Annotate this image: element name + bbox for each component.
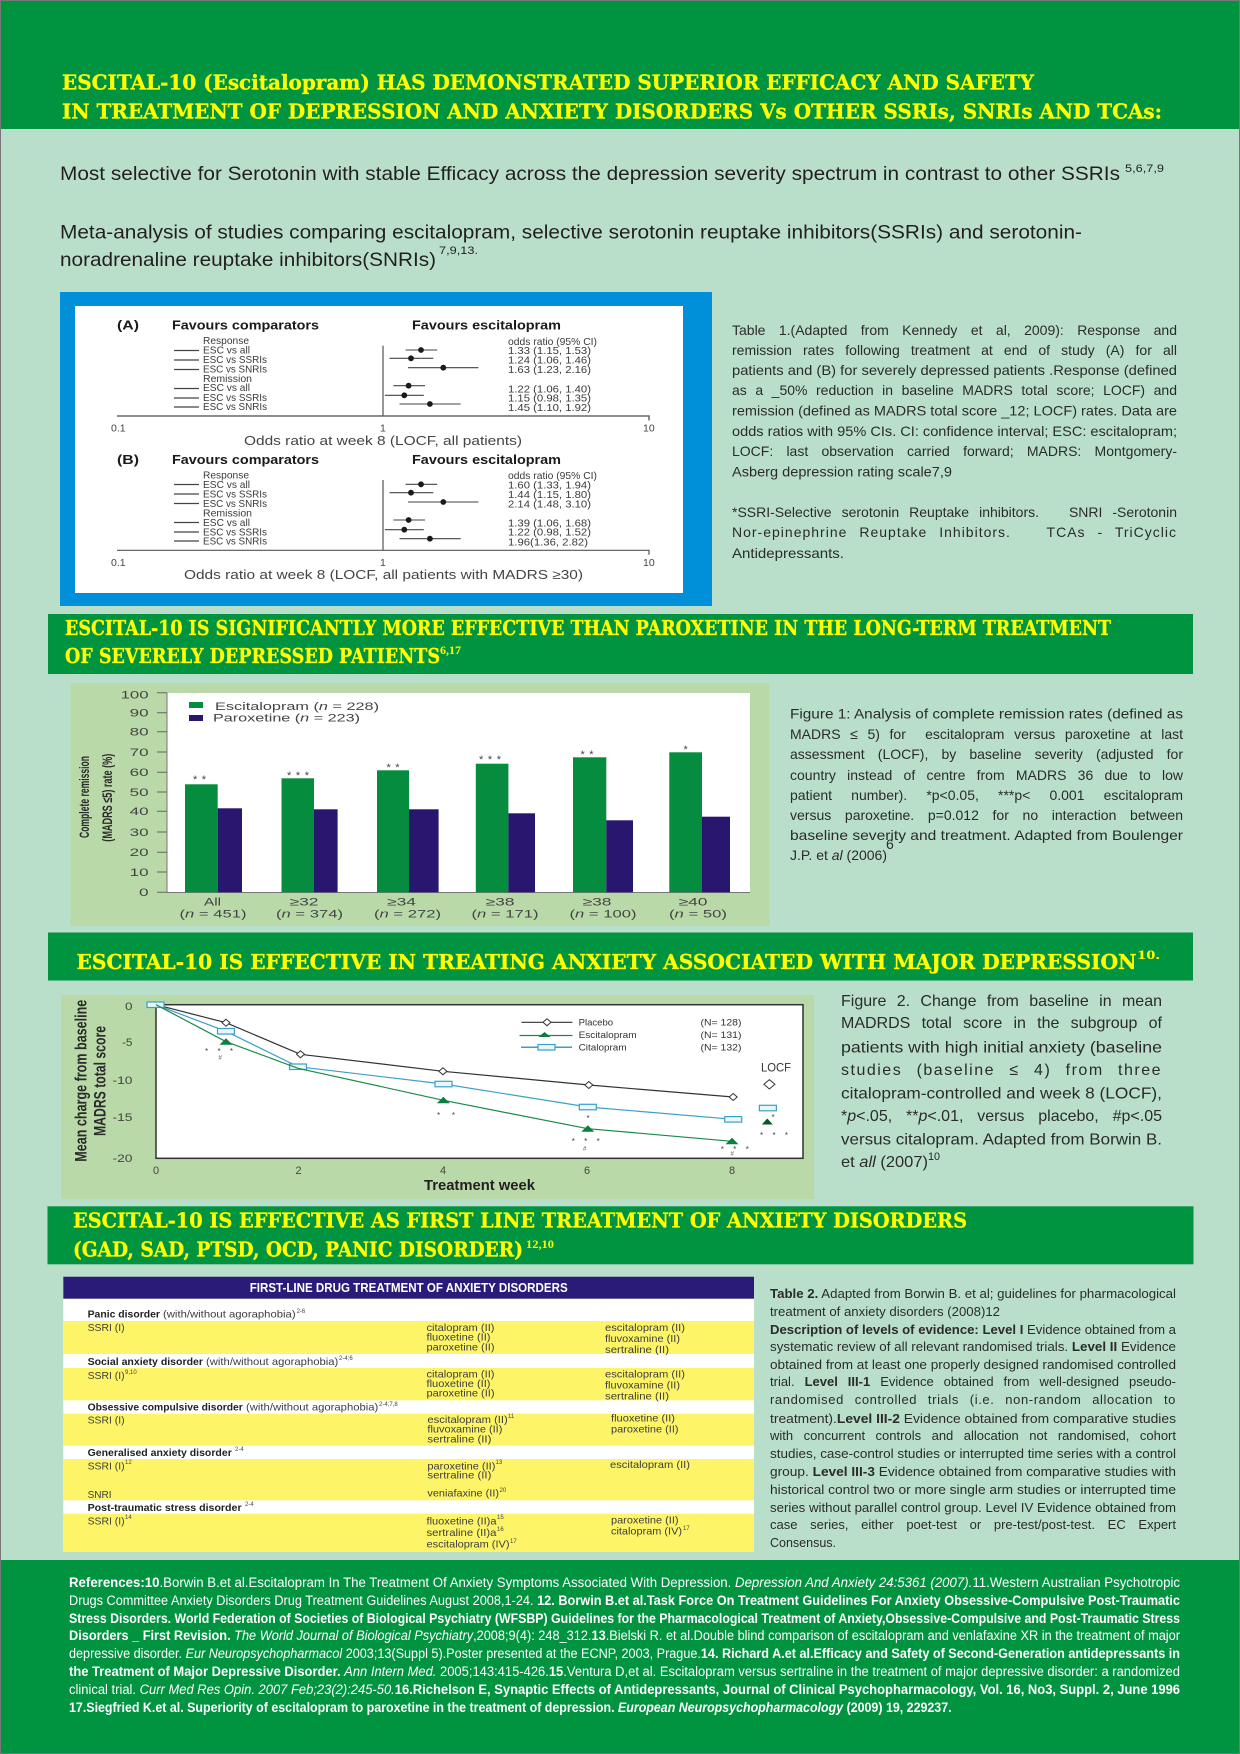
forest plot A: odds ratio (95% CI) <box>508 336 597 348</box>
y axis numbers: 70 <box>130 747 149 759</box>
y axis numbers: 90 <box>130 708 149 720</box>
row: generalised anxiety disorder: 12 <box>125 1460 132 1466</box>
x axis labels: (n = 50) <box>669 908 727 920</box>
forest plot B: 1.22 (0.98, 1.52) <box>508 527 591 539</box>
significance marks: *** <box>572 1137 600 1146</box>
row: social anxiety disorder: escitalopram (II) <box>605 1368 685 1380</box>
purple bars <box>218 808 730 892</box>
row: social anxiety disorder <box>88 1356 685 1402</box>
Table 1 caption: Asberg depression rating scale7,9 <box>732 464 952 480</box>
forest plot A: 1.63 (1.23, 2.16) <box>508 364 591 376</box>
row: social anxiety disorder: (with/without agoraphobia) <box>206 1356 338 1368</box>
row: social anxiety disorder: fluoxetine (II) <box>426 1378 490 1390</box>
Figure 1 caption: J.P. et al (2006) <box>790 847 887 863</box>
row: generalised anxiety disorder: Generalised anxiety disorder <box>88 1447 232 1459</box>
Figure 1 caption: Figure 1: Analysis of complete remission rates (defined as <box>790 705 1183 721</box>
band: first line treatment heading: (GAD, SAD, PTSD, OCD, PANIC DISORDER) <box>73 1238 523 1262</box>
x axis labels: ≥38 <box>582 897 612 909</box>
forest plot A: ESC vs all <box>203 382 250 394</box>
panel: MADRS line chart <box>61 995 814 1199</box>
Figure 1 caption: patient number). *p<0.05, ***p< 0.001 escitalopram <box>790 786 1183 802</box>
y axis title <box>72 1000 110 1162</box>
row: social anxiety disorder: fluvoxamine (II) <box>605 1379 680 1391</box>
legend <box>189 701 379 725</box>
forest plot A: ESC vs SSRIs <box>203 354 267 366</box>
row: panic disorder: fluvoxamine (II) <box>605 1333 680 1345</box>
footer: references: depressive disorder. Eur Neuropsychopharmacol 2003;13(Suppl 5).Poster presented at the ECNP, 2003, Prague.14. Richard A.et al.Efficacy and Safety of Second-Generation antidepressants in <box>69 1646 1180 1661</box>
significance marks <box>205 1047 788 1158</box>
y axis title: (MADRS ≤5) rate (%) <box>99 754 115 842</box>
forest plot B: ESC vs SSRIs <box>203 526 267 538</box>
Table 2 caption: treatment). Level III-2 Evidence obtained from comparative studies <box>770 1411 1177 1426</box>
x axis numbers <box>153 1165 735 1177</box>
series: escitalopram <box>156 1005 773 1144</box>
forest plot A: ESC vs SSRIs <box>203 392 267 404</box>
forest plot B: Response <box>203 470 249 482</box>
x axis labels: ≥40 <box>678 897 708 909</box>
Table 2 caption: randomised controlled trials (i.e. non-random allocation to <box>770 1392 1176 1407</box>
significance marks: # <box>218 1056 222 1062</box>
y axis title <box>76 754 115 842</box>
y axis numbers: 100 <box>121 690 149 702</box>
y axis numbers <box>112 1001 132 1165</box>
Figure 1 caption: assessment (LOCF), by baseline severity (adjusted for <box>790 746 1183 762</box>
row: panic disorder <box>88 1308 685 1356</box>
legend: (N= 131) <box>700 1030 742 1040</box>
Figure 2 caption: patients with high initial anxiety (baseline <box>841 1040 1162 1057</box>
row: post-traumatic stress disorder: citalopram (IV) <box>611 1526 682 1538</box>
Figure 2 caption: *p<.05, **p<.01, versus placebo, #p<.05 <box>841 1108 1162 1124</box>
Table 1 caption: Antidepressants. <box>732 545 844 561</box>
band: first line treatment heading: 12,10 <box>526 1237 554 1251</box>
Table 2 caption: studies, case-control studies or interrupted time series with a control <box>770 1446 1176 1461</box>
y axis numbers: 50 <box>130 787 149 799</box>
row: panic disorder: SSRI (I) <box>88 1322 125 1334</box>
Figure 1 caption <box>790 705 1183 863</box>
row: obsessive compulsive disorder: escitalopram (II) <box>427 1414 508 1426</box>
significance marks: * <box>586 1114 590 1123</box>
forest plot B: 1.39 (1.06, 1.68) <box>508 517 591 529</box>
row: generalised anxiety disorder: veniafaxine (II) <box>427 1488 499 1500</box>
forest plot A: 1.45 (1.10, 1.92) <box>508 402 591 414</box>
row: obsessive compulsive disorder: Obsessive compulsive disorder <box>88 1401 243 1413</box>
row: post-traumatic stress disorder: Post-traumatic stress disorder <box>88 1502 242 1514</box>
Table 2 caption: treatment of anxiety disorders (2008)12 <box>770 1304 1000 1319</box>
significance marks: *** <box>721 1145 749 1154</box>
row: generalised anxiety disorder: 13 <box>496 1460 503 1466</box>
y axis numbers: -20 <box>112 1153 132 1165</box>
forest plot A: (A) <box>117 318 139 333</box>
row: generalised anxiety disorder: sertraline (II) <box>427 1470 491 1482</box>
x axis labels <box>180 897 727 920</box>
footer: references: the Treatment of Major Depressive Disorder. Ann Intern Med. 2005;143:415-426.15.Ventura D,et al. Escitalopram versus sertraline in the treatment of major depressive disorder: a randomized <box>69 1664 1180 1679</box>
legend: Escitalopram ( n = 228) <box>215 701 379 713</box>
row: post-traumatic stress disorder: escitalopram (IV) <box>426 1539 510 1551</box>
Figure 2 caption <box>841 992 1162 1171</box>
x axis labels: (n = 171) <box>472 908 538 920</box>
Table 2 caption: series without parallel control group. Level IV Evidence obtained from <box>770 1500 1176 1515</box>
footer: references: Drugs Committee Anxiety Disorders Drug Treatment Guidelines August 2008,1-24. 12. Borwin B.et al.Task Force On Treatment Guidelines For Anxiety Obsessive-Compulsive Post-Traumatic <box>69 1593 1180 1608</box>
forest plot B: 1.96(1.36, 2.82) <box>508 537 588 549</box>
row: obsessive compulsive disorder: fluvoxamine (II) <box>427 1424 502 1436</box>
Table 2 caption: Table 2. Adapted from Borwin B. et al; guidelines for pharmacological <box>770 1286 1176 1301</box>
row: post-traumatic stress disorder: 17 <box>510 1539 517 1545</box>
LOCF label: LOCF <box>761 1062 791 1074</box>
forest plot A: 1.24 (1.06, 1.46) <box>508 354 591 366</box>
forest plot B: 0.1 <box>111 557 126 569</box>
forest plot B <box>111 452 655 582</box>
y axis numbers: -5 <box>122 1037 132 1049</box>
Figure 2 caption: MADRDS total score in the subgroup of <box>841 1015 1162 1032</box>
x axis labels: ≥38 <box>486 897 514 909</box>
row: social anxiety disorder: Social anxiety disorder <box>88 1356 203 1368</box>
forest plot B: Remission <box>203 507 252 519</box>
forest plot B: 1.60 (1.33, 1.94) <box>508 480 591 492</box>
x axis labels: (n = 374) <box>276 908 343 920</box>
x axis numbers: 0 <box>153 1165 159 1177</box>
Table 1 caption: patients and (B) for severely depressed patients .Response (defined <box>732 362 1177 378</box>
band: anxiety heading <box>48 932 1193 980</box>
row: generalised anxiety disorder: SNRI <box>88 1489 112 1501</box>
forest plot A: 1.15 (0.98, 1.35) <box>508 393 591 405</box>
Figure 1 caption: country instead of centre from MADRS 36 due to low <box>790 766 1183 782</box>
row: obsessive compulsive disorder: SSRI (I) <box>88 1415 125 1427</box>
forest plot B: 1.44 (1.15, 1.80) <box>508 489 591 501</box>
footer: references: Disorders _ First Revision. The World Journal of Biological Psychiatry,2008;9(4): 248_312.13.Bielski R. et al.Double blind comparison of escitalopram and venlafaxine XR in the treatment of major <box>69 1628 1180 1643</box>
Figure 1 caption: MADRS ≤ 5) for escitalopram versus paroxetine at last <box>790 726 1183 742</box>
row: panic disorder: sertraline (II) <box>605 1344 669 1356</box>
header band <box>0 0 1240 129</box>
row: generalised anxiety disorder: SSRI (I) <box>88 1460 125 1472</box>
forest plot B: Favours comparators <box>172 452 319 467</box>
Figure 1 caption: baseline severity and treatment. Adapted from Boulenger <box>790 827 1183 843</box>
Table 1 caption: odds ratios with 95% CIs. CI: confidence interval; ESC: escitalopram; <box>732 423 1177 439</box>
main title: IN TREATMENT OF DEPRESSION AND ANXIETY DISORDERS Vs OTHER SSRIs, SNRIs AND TCAs: <box>62 100 1162 124</box>
row: generalised anxiety disorder: paroxetine (II) <box>427 1460 495 1472</box>
row: generalised anxiety disorder <box>88 1447 690 1501</box>
row: panic disorder: fluoxetine (II) <box>426 1332 490 1344</box>
panel: remission bar chart <box>70 683 770 926</box>
forest plot A: Response <box>203 335 249 347</box>
band: paroxetine heading: 6,17 <box>440 643 461 657</box>
row: post-traumatic stress disorder: 16 <box>497 1527 504 1533</box>
y axis numbers <box>121 690 149 899</box>
forest plot B: ESC vs all <box>203 517 250 529</box>
x axis labels: (n = 451) <box>180 908 246 920</box>
y axis numbers: 30 <box>130 827 149 839</box>
footer: references: References:10.Borwin B.et al.Escitalopram In The Treatment Of Anxiety Symptoms Associated With Depression. Depression And Anxiety 24:5361 (2007).11.Western Australian Psychotropic <box>69 1575 1180 1590</box>
forest plot B: (B) <box>117 452 139 467</box>
significance stars: * <box>684 744 688 756</box>
Figure 1 caption: 6 <box>886 836 894 852</box>
Figure 2 caption: Figure 2. Change from baseline in mean <box>841 992 1162 1010</box>
Table 2 caption <box>770 1286 1177 1550</box>
significance marks: # <box>730 1152 734 1158</box>
Figure 2 caption: studies (baseline ≤ 4) from three <box>841 1062 1162 1078</box>
band: first line treatment heading <box>48 1206 1194 1264</box>
Table 1 caption <box>732 321 1177 561</box>
row: obsessive compulsive disorder: 2-4;7,8 <box>379 1402 398 1408</box>
x axis title: Treatment week <box>424 1177 536 1194</box>
significance stars <box>193 744 688 786</box>
forest plot B: ESC vs SNRIs <box>203 498 267 510</box>
Table 2 caption: trial. Level III-1 Evidence obtained from well-designed pseudo- <box>770 1374 1176 1389</box>
row: obsessive compulsive disorder: paroxetine (II) <box>611 1424 678 1436</box>
forest plot A: Remission <box>203 373 252 385</box>
row: obsessive compulsive disorder: (with/without agoraphobia) <box>246 1401 378 1413</box>
Table 1 caption: as a _50% reduction in baseline MADRS total score; LOCF) and <box>732 382 1177 398</box>
y axis numbers: 10 <box>130 867 149 879</box>
Figure 1 caption: versus paroxetine. p=0.012 for no interaction between <box>790 807 1183 823</box>
significance marks: * <box>772 1113 775 1122</box>
row: post-traumatic stress disorder: SSRI (I) <box>88 1515 125 1527</box>
row: obsessive compulsive disorder: sertraline (II) <box>427 1433 491 1445</box>
significance marks: ** <box>437 1111 455 1120</box>
forest plot A: 1.22 (1.06, 1.40) <box>508 383 591 395</box>
forest plot A: Favours comparators <box>172 318 319 333</box>
panel: anxiety drug table <box>63 1277 754 1552</box>
band: paroxetine heading <box>48 614 1193 674</box>
forest plot B: ESC vs SSRIs <box>203 488 267 500</box>
forest plot B: ESC vs all <box>203 479 250 491</box>
x axis labels: All <box>204 897 221 909</box>
band: first line treatment heading: ESCITAL-10 IS EFFECTIVE AS FIRST LINE TREATMENT OF ANXIETY DISORDERS <box>73 1209 967 1233</box>
forest plot B: 2.14 (1.48, 3.10) <box>508 498 591 510</box>
row: panic disorder: citalopram (II) <box>426 1322 494 1334</box>
series: citalopram <box>147 1002 776 1122</box>
x axis labels: (n = 272) <box>374 908 441 920</box>
forest plot A: 0.1 <box>111 422 126 434</box>
row: generalised anxiety disorder: escitalopram (II) <box>610 1459 690 1471</box>
Table 1 caption: Table 1.(Adapted from Kennedy et al, 2009): Response and <box>732 322 1177 338</box>
series: placebo <box>156 1005 775 1100</box>
y axis numbers: 60 <box>130 767 149 779</box>
row: panic disorder: Panic disorder <box>88 1308 160 1320</box>
intro text: meta-analysis: Meta-analysis of studies comparing escitalopram, selective serotonin reuptake inhibitors(SSRIs) and serotonin- <box>60 221 1082 243</box>
Figure 2 caption: versus citalopram. Adapted from Borwin B. <box>841 1132 1162 1149</box>
row: post-traumatic stress disorder: 17 <box>683 1526 690 1532</box>
forest plot B: Odds ratio at week 8 (LOCF, all patients with MADRS ≥30) <box>184 567 583 582</box>
Table 2 caption: Consensus. <box>770 1535 836 1550</box>
forest plot A: Favours escitalopram <box>412 318 561 333</box>
legend: (N= 128) <box>700 1018 742 1028</box>
row: obsessive compulsive disorder <box>88 1401 679 1445</box>
x axis numbers: 2 <box>295 1165 302 1177</box>
main title <box>62 70 1162 124</box>
y axis numbers: 40 <box>130 806 149 818</box>
x axis numbers: 6 <box>584 1165 590 1177</box>
x axis numbers: 8 <box>729 1165 735 1177</box>
row: post-traumatic stress disorder: 2-4 <box>245 1502 254 1508</box>
significance marks: # <box>583 1146 587 1152</box>
row: social anxiety disorder: citalopram (II) <box>426 1368 494 1380</box>
row: social anxiety disorder: sertraline (II) <box>605 1390 669 1402</box>
Table 1 caption: remission rates following treatment at end of study (A) for all <box>732 342 1177 358</box>
Table 2 caption: with concurrent controls and allocation not randomised, cohort <box>770 1428 1176 1443</box>
y axis numbers: 80 <box>130 726 149 738</box>
green bars <box>185 752 702 892</box>
x axis labels: ≥34 <box>387 897 416 909</box>
Table 2 caption: historical control two or more single arm studies or interrupted time <box>770 1482 1176 1497</box>
y axis numbers: -10 <box>112 1075 132 1087</box>
y axis numbers: 0 <box>139 887 149 899</box>
forest plot B: 10 <box>643 557 655 569</box>
significance marks: *** <box>205 1047 233 1056</box>
row: social anxiety disorder: 2-4;6 <box>339 1356 353 1362</box>
row: generalised anxiety disorder: 2-4 <box>235 1447 244 1453</box>
intro text: selectivity: 5,6,7,9 <box>1125 163 1164 175</box>
intro text: meta-analysis: 7,9,13. <box>439 245 478 257</box>
x axis numbers: 4 <box>440 1165 446 1177</box>
Figure 2 caption: citalopram-controlled and week 8 (LOCF), <box>841 1086 1162 1103</box>
Figure 2 caption: 10 <box>928 1151 940 1163</box>
intro text: selectivity: Most selective for Serotonin with stable Efficacy across the depression severity spectrum in contrast to other SSRIs <box>60 163 1120 185</box>
legend: Placebo <box>579 1018 613 1028</box>
row: social anxiety disorder: paroxetine (II) <box>426 1388 494 1400</box>
forest plot A: Odds ratio at week 8 (LOCF, all patients) <box>244 433 522 448</box>
Table 2 caption: group. Level III-3 Evidence obtained from comparative studies with <box>770 1464 1176 1479</box>
legend: Paroxetine ( n = 223) <box>213 713 360 725</box>
y axis numbers: 0 <box>125 1001 132 1013</box>
forest plot A: ESC vs all <box>203 344 250 356</box>
row: obsessive compulsive disorder: fluoxetine (II) <box>611 1413 675 1425</box>
row: post-traumatic stress disorder: sertraline (II)a <box>426 1527 497 1539</box>
footer: references <box>0 1560 1240 1754</box>
significance stars: ** <box>580 749 594 761</box>
row: panic disorder: 2-6 <box>297 1309 306 1315</box>
forest plot B: odds ratio (95% CI) <box>508 470 597 482</box>
x axis labels: (n = 100) <box>570 908 636 920</box>
row: post-traumatic stress disorder: 14 <box>125 1515 132 1521</box>
forest plot A: ESC vs SNRIs <box>203 364 267 376</box>
Table 2 caption: case series, either poet-test or pre-test/post-test. EC Expert <box>770 1517 1176 1532</box>
Table 1 caption: *SSRI-Selective serotonin Reuptake inhibitors. SNRI -Serotonin <box>732 504 1177 520</box>
y axis title: MADRS total score <box>90 1026 110 1136</box>
row: social anxiety disorder: 9,10 <box>125 1370 137 1376</box>
footer: references: clinical trial. Curr Med Res Opin. 2007 Feb;23(2):245-50.16.Richelson E, Synaptic Effects of Antidepressants, Journal of Clinical Psychopharmacology, Vol. 16, No3, Suppl. 2, June 1996 <box>69 1682 1180 1697</box>
row: post-traumatic stress disorder: fluoxetine (II)a <box>426 1515 497 1527</box>
significance stars: *** <box>287 770 310 782</box>
Table 1 caption: remission (defined as MADRS total score _12; LOCF) rates. Data are <box>732 402 1177 418</box>
forest plot B: 1 <box>380 557 386 569</box>
significance stars: *** <box>479 754 502 766</box>
significance marks: *** <box>760 1131 788 1140</box>
row: obsessive compulsive disorder: 11 <box>508 1414 515 1420</box>
row: post-traumatic stress disorder <box>88 1502 690 1551</box>
legend: Citalopram <box>579 1042 627 1052</box>
table header: FIRST-LINE DRUG TREATMENT OF ANXIETY DISORDERS <box>250 1281 568 1295</box>
legend <box>520 1018 742 1052</box>
significance stars: ** <box>386 762 400 774</box>
row: post-traumatic stress disorder: paroxetine (II) <box>611 1514 678 1526</box>
Figure 2 caption: et all (2007) <box>841 1154 928 1171</box>
row: panic disorder: escitalopram (II) <box>605 1322 685 1334</box>
intro text: meta-analysis: noradrenaline reuptake inhibitors(SNRIs) <box>60 249 436 271</box>
row: generalised anxiety disorder: 20 <box>500 1488 507 1494</box>
forest plot A: 1 <box>380 422 386 434</box>
y axis title: Mean charge from baseline <box>72 1000 90 1162</box>
y axis title: Complete remission <box>76 756 92 838</box>
panel: forest plot <box>60 292 712 606</box>
forest plot A <box>111 318 655 448</box>
forest plot B: ESC vs SNRIs <box>203 536 267 548</box>
legend: Escitalopram <box>579 1030 637 1040</box>
footer: references: 17.Siegfried K.et al. Superiority of escitalopram to paroxetine in the treatment of depression. European Neuropsychopharmacology (2009) 19, 229237. <box>69 1700 952 1715</box>
Table 2 caption: obtained from at least one properly designed randomised controlled <box>770 1357 1176 1372</box>
row: social anxiety disorder: SSRI (I) <box>88 1370 125 1382</box>
significance stars: ** <box>193 774 207 786</box>
row: post-traumatic stress disorder: 15 <box>497 1515 504 1521</box>
x axis labels: ≥32 <box>290 897 318 909</box>
forest plot A: 1.33 (1.15, 1.53) <box>508 345 591 357</box>
Table 2 caption: systematic review of all relevant randomised trials. Level II Evidence <box>770 1339 1176 1354</box>
Table 1 caption: Nor-epinephrine Reuptake Inhibitors. TCAs - TriCyclic <box>732 524 1177 540</box>
legend: (N= 132) <box>700 1042 742 1052</box>
row: panic disorder: paroxetine (II) <box>426 1341 494 1353</box>
band: anxiety heading: ESCITAL-10 IS EFFECTIVE IN TREATING ANXIETY ASSOCIATED WITH MAJOR DEPRESSION <box>76 950 1136 974</box>
row: panic disorder: (with/without agoraphobia) <box>163 1308 296 1320</box>
y axis numbers: -15 <box>112 1112 132 1124</box>
main title: ESCITAL-10 (Escitalopram) HAS DEMONSTRATED SUPERIOR EFFICACY AND SAFETY <box>62 70 1034 94</box>
forest plot B: Favours escitalopram <box>412 452 561 467</box>
band: paroxetine heading: OF SEVERELY DEPRESSED PATIENTS <box>65 644 440 668</box>
forest plot A: 10 <box>643 422 655 434</box>
Table 1 caption: LOCF: last observation carried forward; MADRS: Montgomery- <box>732 443 1177 459</box>
intro text: meta-analysis <box>60 221 1082 271</box>
forest plot A: ESC vs SNRIs <box>203 401 267 413</box>
Table 2 caption: Description of levels of evidence: Level I Evidence obtained from a <box>770 1322 1177 1337</box>
band: anxiety heading: 10. <box>1137 947 1160 962</box>
y axis numbers: 20 <box>130 847 149 859</box>
